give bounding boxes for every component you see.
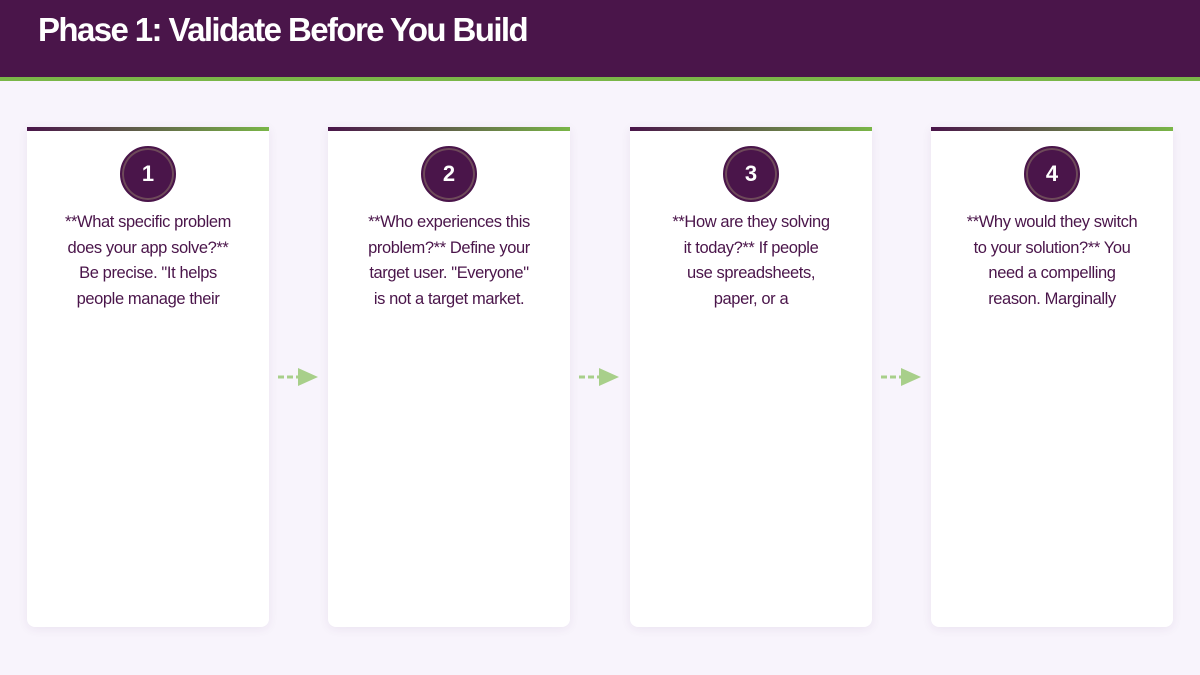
arrow 2 bbox=[579, 368, 619, 386]
text 4: **Why would they switch bbox=[967, 213, 1137, 231]
panel: step 1 bbox=[27, 127, 269, 627]
title: Phase 1: Validate Before You Build bbox=[38, 11, 527, 48]
text 4: reason. Marginally bbox=[988, 290, 1116, 308]
text 2: problem?** Define your bbox=[368, 238, 530, 256]
text 2: **Who experiences this bbox=[368, 213, 530, 231]
badge 3 bbox=[723, 146, 779, 202]
text 2: is not a target market. bbox=[374, 290, 524, 308]
text 1: does your app solve?** bbox=[68, 238, 228, 256]
text 4 bbox=[967, 213, 1137, 308]
badge 2: 2 bbox=[443, 161, 455, 186]
badge 1: 1 bbox=[142, 161, 154, 186]
text 3 bbox=[672, 213, 830, 308]
badge 2 bbox=[421, 146, 477, 202]
text 2: target user. "Everyone" bbox=[369, 264, 529, 282]
badge 3: 3 bbox=[745, 161, 757, 186]
panel: step 3 bbox=[630, 127, 872, 627]
text 1: people manage their bbox=[77, 290, 219, 308]
text 3: paper, or a bbox=[714, 290, 788, 308]
text 3: use spreadsheets, bbox=[687, 264, 815, 282]
text 4: need a compelling bbox=[988, 264, 1116, 282]
badge 4: 4 bbox=[1046, 161, 1058, 186]
badge 1 bbox=[120, 146, 176, 202]
text 1 bbox=[65, 213, 231, 308]
text 1: Be precise. "It helps bbox=[79, 264, 217, 282]
arrow 3 bbox=[881, 368, 921, 386]
text 3: **How are they solving bbox=[672, 213, 830, 231]
arrow 1 bbox=[278, 368, 318, 386]
badge 4 bbox=[1024, 146, 1080, 202]
header bbox=[0, 0, 1200, 81]
panel: step 4 bbox=[931, 127, 1173, 627]
text 4: to your solution?** You bbox=[974, 238, 1130, 256]
text 2 bbox=[368, 213, 530, 308]
text 1: **What specific problem bbox=[65, 213, 231, 231]
text 3: it today?** If people bbox=[684, 238, 818, 256]
panel: step 2 bbox=[328, 127, 570, 627]
